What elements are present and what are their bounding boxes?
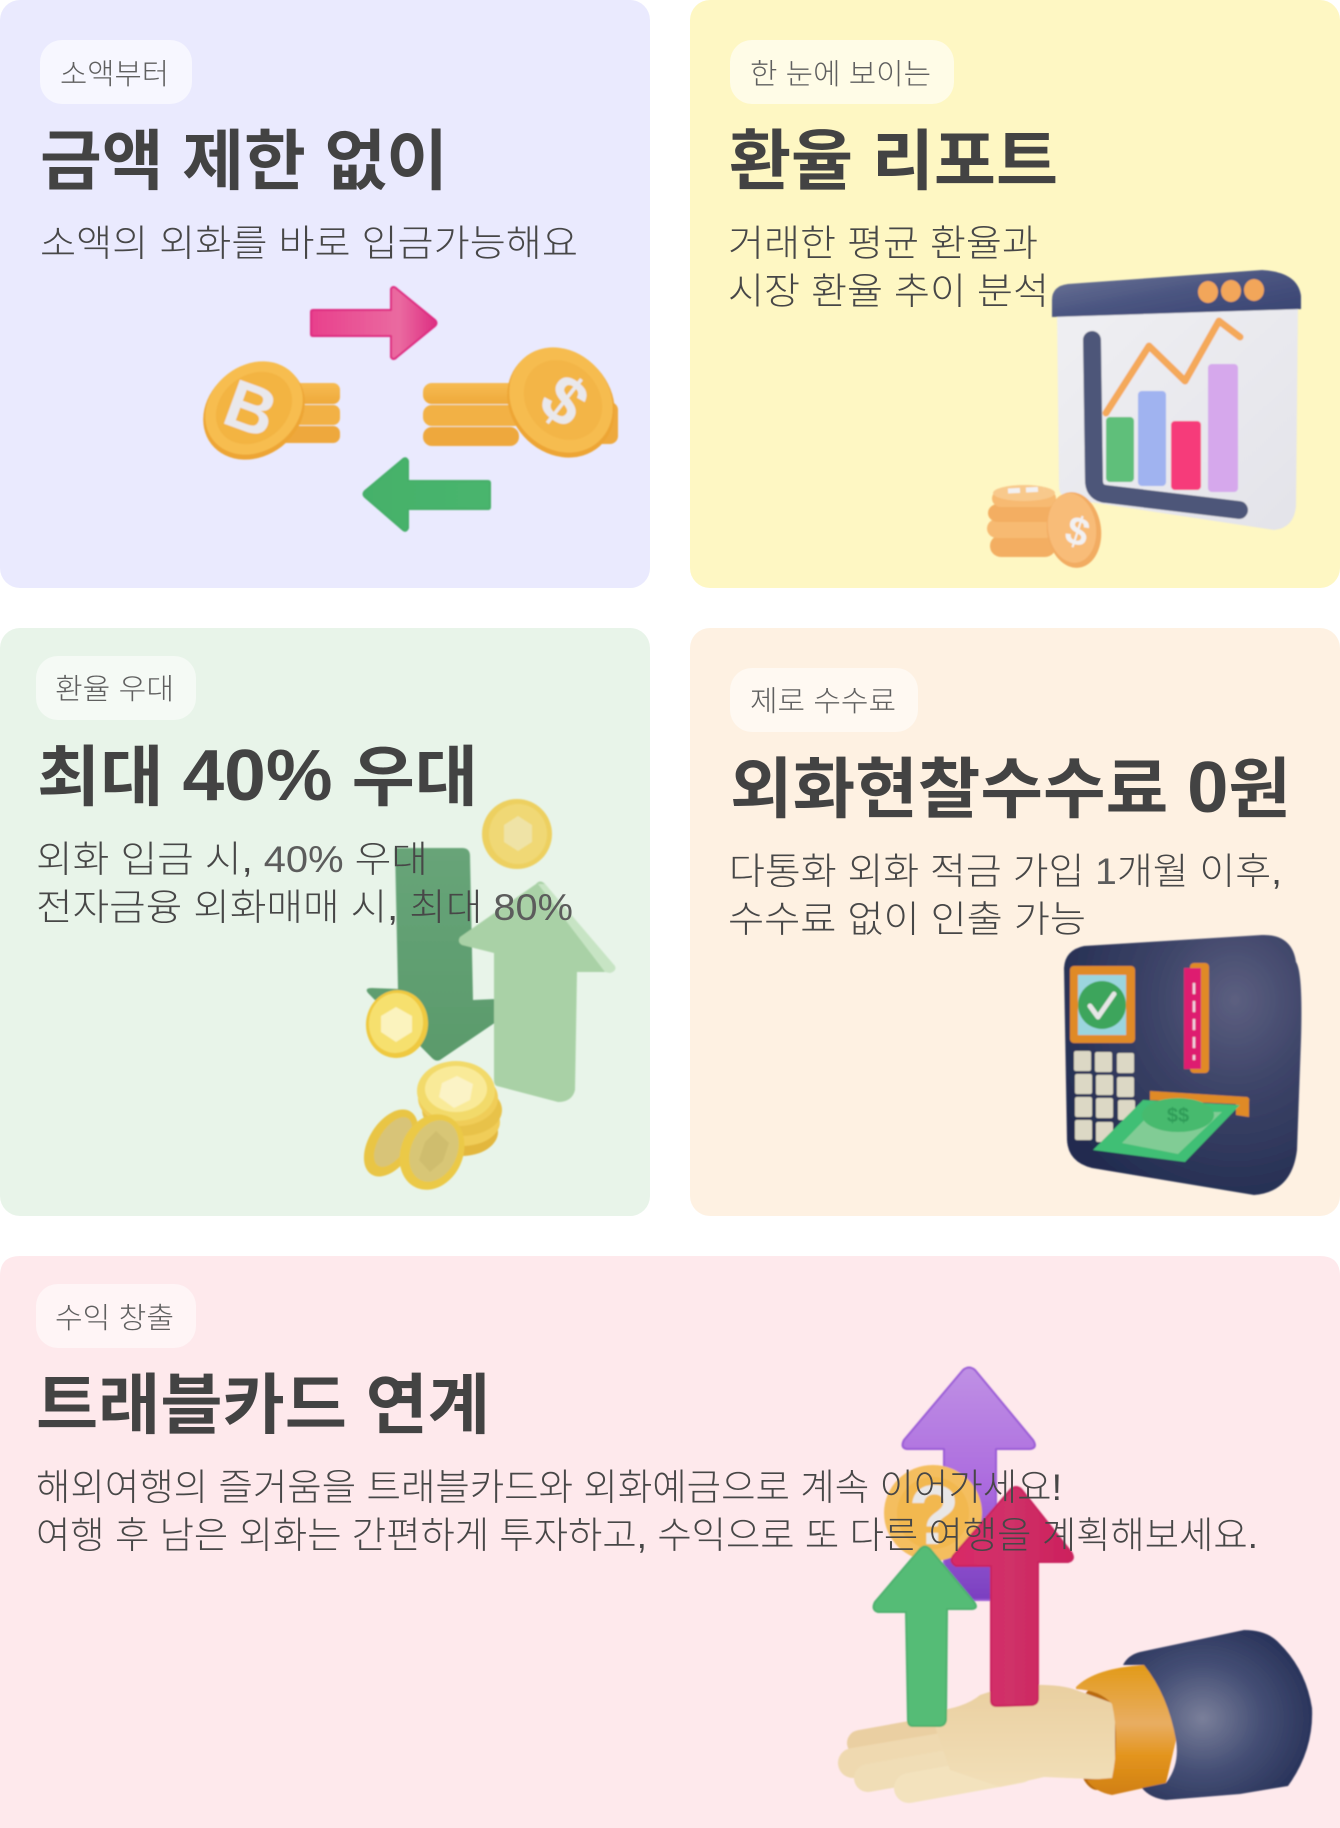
- tag: 수익 창출: 수익 창출: [55, 1303, 174, 1335]
- heading: 외화현찰수수료 0원: 외화현찰수수료 0원: [730, 748, 1291, 828]
- text: 수수료 설명: [728, 851, 1282, 940]
- icon: dark green down arrow: [367, 848, 496, 1061]
- illustration: chart window with coins: [987, 270, 1301, 571]
- panel: 외화현찰수수료 0원: [690, 628, 1340, 1216]
- icon: navy sleeve: [1123, 1630, 1312, 1800]
- tag: 제로 수수료: 제로 수수료: [750, 686, 896, 718]
- icon: bitcoin coin stack: [184, 342, 340, 480]
- icon: bitcoin coin stack: B: [215, 365, 287, 453]
- icon: pink right arrow: [311, 287, 436, 359]
- icon: light green up arrow: [459, 882, 615, 1102]
- icon: coin with question mark: ?: [908, 1468, 960, 1562]
- text: 수수료 설명: 다통화 외화 적금 가입 1개월 이후,: [729, 851, 1282, 892]
- text: 트래블카드 설명: 해외여행의 즐거움을 트래블카드와 외화예금으로 계속 이어가세요!: [36, 1467, 1062, 1508]
- tag: 환율 우대: 환율 우대: [55, 674, 174, 706]
- icon: middle coin: [362, 986, 432, 1062]
- tag: 소액부터: [40, 40, 192, 104]
- icon: coin stack: $: [1060, 508, 1095, 556]
- illustration: hand holding rising arrows: [853, 1368, 1312, 1800]
- text: 트래블카드 설명: 여행 후 남은 외화는 간편하게 투자하고, 수익으로 또 다른 여행을 계획해보세요.: [36, 1515, 1258, 1556]
- text: 평균 환율 분석: [728, 223, 1049, 312]
- text: 수수료 설명: 수수료 없이 인출 가능: [728, 899, 1086, 940]
- illustration: arrows and gold coins: [353, 799, 615, 1200]
- ATM screen with check: [1070, 966, 1135, 1043]
- text: 트래블카드 설명: [36, 1467, 1258, 1556]
- text: 소액의 외화를 바로 입금가능해요: 소액의 외화를 바로 입금가능해요: [40, 223, 578, 264]
- icon: top coin: [482, 799, 552, 869]
- tag: 한 눈에 보이는: 한 눈에 보이는: [750, 59, 931, 91]
- bar chart: [1106, 364, 1238, 492]
- chart axes: [1092, 340, 1239, 510]
- icon: dollar coin stack: [423, 326, 637, 480]
- illustration: coins exchange with arrows: [184, 287, 637, 531]
- icon: shirt cuff interior: [1075, 1686, 1119, 1790]
- text: 우대 설명: 전자금융 외화매매 시, 최대 80%: [36, 887, 573, 928]
- heading: 환율 리포트: 환율 리포트: [729, 124, 1058, 198]
- text: 우대 설명: 외화 입금 시, 40% 우대: [36, 839, 428, 880]
- icon: open hand: [853, 1685, 1115, 1788]
- icon: orange shirt cuff: [1076, 1665, 1176, 1795]
- panel: 환율 리포트: [690, 0, 1340, 588]
- tag: 제로 수수료: [730, 668, 918, 732]
- panel: 금액 제한 없이: [0, 0, 650, 588]
- icon: coin with question mark: [884, 1465, 982, 1562]
- icon: green arrow: [874, 1546, 976, 1726]
- ATM body: [1064, 935, 1301, 1195]
- chart window body: [1057, 305, 1298, 530]
- icon: green left arrow: [364, 458, 490, 531]
- text: 평균 환율 분석: 시장 환율 추이 분석: [728, 271, 1049, 312]
- tag: 환율 우대: [36, 656, 196, 720]
- keypad: [1074, 1051, 1135, 1142]
- icon: gold coin pile: [353, 1061, 502, 1200]
- window dots: [1198, 279, 1264, 303]
- icon: coin stack: [987, 485, 1106, 571]
- cash slot and banknote: $$: [1167, 1105, 1189, 1127]
- illustration: ATM machine: [1064, 935, 1301, 1195]
- card slot and card: [1184, 963, 1209, 1073]
- heading: 금액 제한 없이: 금액 제한 없이: [40, 124, 448, 198]
- text: 평균 환율 분석: 거래한 평균 환율과: [728, 223, 1038, 264]
- panel: 최대 40% 우대: [0, 628, 650, 1216]
- heading: 트래블카드 연계: 트래블카드 연계: [36, 1368, 490, 1442]
- tag: 한 눈에 보이는: [730, 40, 954, 104]
- tag: 수익 창출: [36, 1284, 196, 1348]
- cash slot and banknote: [1093, 1091, 1249, 1162]
- tag: 소액부터: 소액부터: [60, 59, 169, 91]
- trend line: [1106, 321, 1240, 413]
- icon: dollar coin stack: $: [526, 359, 603, 442]
- text: 우대 설명: [36, 839, 573, 928]
- panel: 트래블카드 연계: [0, 1256, 1340, 1828]
- heading: 최대 40% 우대: 최대 40% 우대: [37, 736, 478, 816]
- icon: purple arrow: [903, 1368, 1035, 1600]
- chart window title bar: [1052, 270, 1301, 317]
- icon: crimson arrow: [952, 1487, 1073, 1706]
